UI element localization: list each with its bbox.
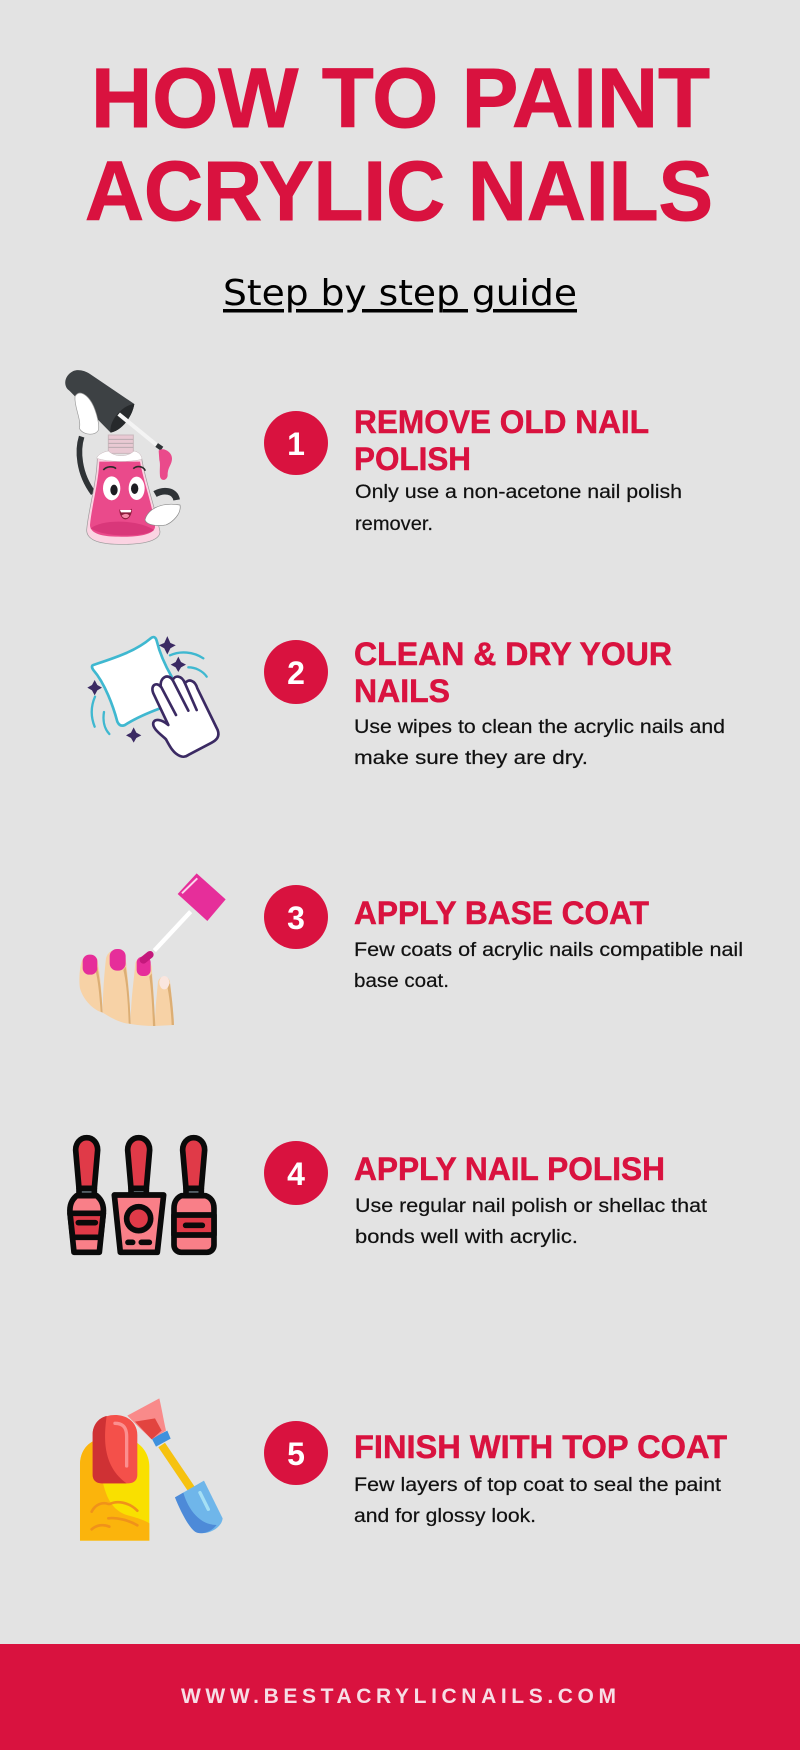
number badge 4: 4 xyxy=(287,1156,305,1192)
right bottle xyxy=(174,1138,214,1252)
icon: yellow finger and brush xyxy=(80,1398,223,1541)
number badge 1 xyxy=(264,411,328,475)
footer url: WWW.BESTACRYLICNAILS.COM xyxy=(181,1685,616,1708)
heading 3: APPLY BASE COAT xyxy=(354,895,649,931)
body 5: Few layers of top coat to seal the paint xyxy=(354,1475,722,1496)
step 4 xyxy=(264,1141,708,1248)
heading 4: APPLY NAIL POLISH xyxy=(354,1151,665,1187)
heading 1 xyxy=(354,404,649,477)
body 1: Only use a non-acetone nail polish xyxy=(355,482,682,503)
body 5: and for glossy look. xyxy=(354,1506,536,1527)
step 1 xyxy=(264,404,682,535)
body 2: make sure they are dry. xyxy=(354,748,588,769)
heading 2: CLEAN & DRY YOUR xyxy=(354,636,672,672)
heading 5: FINISH WITH TOP COAT xyxy=(354,1429,727,1465)
body 3: Few coats of acrylic nails compatible nail xyxy=(354,940,743,961)
number badge 5: 5 xyxy=(287,1436,305,1472)
number badge 2: 2 xyxy=(287,655,305,691)
number badge 4 xyxy=(264,1141,328,1205)
body 3: base coat. xyxy=(354,971,449,992)
title xyxy=(85,51,713,238)
body 3 xyxy=(354,940,743,992)
number badge 3: 3 xyxy=(287,900,305,936)
step 5 xyxy=(264,1421,727,1527)
body 4 xyxy=(355,1196,708,1248)
icon: three nail polish bottles xyxy=(70,1138,214,1252)
body 4: Use regular nail polish or shellac that xyxy=(355,1196,708,1217)
number badge 1: 1 xyxy=(287,426,305,462)
step 3 xyxy=(264,885,743,992)
title: HOW TO PAINT xyxy=(91,51,710,145)
body 2 xyxy=(354,717,725,769)
number badge 2 xyxy=(264,640,328,704)
footer band xyxy=(0,1644,800,1750)
icon: painting fingernails xyxy=(79,873,226,1026)
body 5 xyxy=(354,1475,722,1527)
middle bottle xyxy=(114,1138,164,1252)
left bottle xyxy=(70,1138,103,1252)
step 2 xyxy=(264,636,725,769)
body 1: remover. xyxy=(355,514,433,535)
icon: wipe and hand xyxy=(87,637,218,757)
icon: nail polish mascot xyxy=(65,370,180,544)
number badge 5 xyxy=(264,1421,328,1485)
heading 1: REMOVE OLD NAIL xyxy=(354,404,649,440)
title: ACRYLIC NAILS xyxy=(85,144,713,238)
subtitle: Step by step guide xyxy=(223,273,577,314)
number badge 3 xyxy=(264,885,328,949)
heading 2: NAILS xyxy=(354,673,450,709)
heading 2 xyxy=(354,636,672,709)
body 2: Use wipes to clean the acrylic nails and xyxy=(354,717,725,738)
body 4: bonds well with acrylic. xyxy=(355,1227,578,1248)
body 1 xyxy=(355,482,682,535)
heading 1: POLISH xyxy=(354,441,471,477)
